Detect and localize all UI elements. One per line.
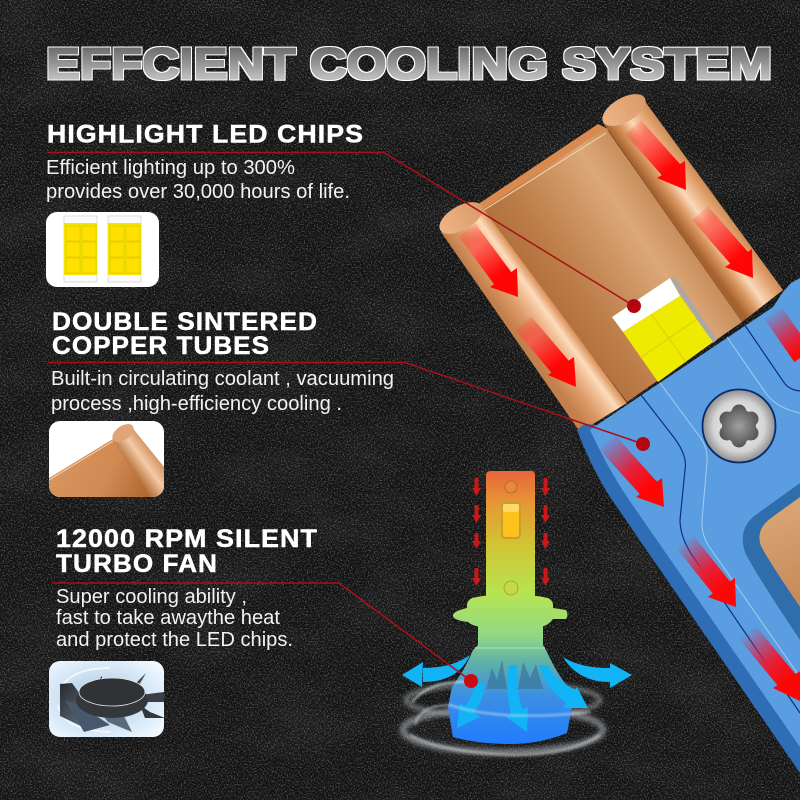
description: fast to take awaythe heat — [56, 607, 280, 629]
callout dot — [627, 299, 641, 313]
air swirl rings, front — [410, 682, 600, 755]
bulb details — [475, 481, 545, 689]
title: EFFCIENT COOLING SYSTEM — [46, 40, 772, 88]
red flow arrow: left tube upper — [467, 230, 518, 297]
red flow arrow: right tube lower — [700, 213, 753, 278]
red heat arrows beside stem — [472, 478, 550, 586]
thumbnail: copper tube — [49, 420, 164, 497]
red flow arrow: left tube lower — [523, 323, 576, 387]
blue housing — [577, 278, 800, 773]
red flow arrow: housing 4 — [773, 313, 800, 356]
heading — [56, 525, 318, 578]
bulb body — [448, 471, 572, 744]
heading: DOUBLE SINTERED — [52, 308, 318, 336]
copper back plate — [468, 124, 742, 402]
description — [56, 586, 293, 651]
section: 12000 RPM silent turbo fan — [49, 525, 478, 737]
heading — [52, 308, 318, 360]
description: Built-in circulating coolant , vacuuming — [51, 368, 394, 390]
section: double sintered copper tubes — [48, 308, 650, 497]
right copper tube — [597, 88, 783, 322]
heading: 12000 RPM SILENT — [56, 525, 318, 553]
thumbnail: LED chips — [46, 212, 159, 287]
description — [46, 157, 350, 203]
torx screw — [702, 390, 776, 462]
left copper tube — [434, 196, 627, 432]
heading: HIGHLIGHT LED CHIPS — [47, 120, 364, 148]
leader line to chip — [47, 152, 634, 306]
callout dot — [464, 674, 478, 688]
description: process ,high-efficiency cooling . — [51, 393, 342, 415]
illustration: copper heat pipe LED module — [434, 88, 800, 773]
description: Super cooling ability , — [56, 586, 247, 608]
LED chip — [612, 278, 717, 382]
red flow arrow: right tube upper — [633, 127, 686, 190]
description: Efficient lighting up to 300% — [46, 157, 295, 179]
air swirl rings, back — [403, 683, 603, 752]
heading: COPPER TUBES — [52, 332, 270, 360]
thumbnail: turbo fan — [49, 661, 165, 737]
description — [51, 368, 394, 415]
leader line to fan — [52, 583, 471, 681]
heading: TURBO FAN — [56, 550, 218, 578]
section: highlight LED chips — [46, 120, 641, 313]
description: and protect the LED chips. — [56, 629, 293, 651]
red flow arrow: housing 3 — [748, 633, 800, 702]
red flow arrow: housing 2 — [685, 542, 736, 607]
blue air arrow: lower right — [539, 665, 588, 708]
red flow arrow: housing 1 — [607, 442, 664, 507]
blue air arrow: lower left — [457, 683, 485, 728]
callout dot — [636, 437, 650, 451]
blue air arrow: left — [402, 655, 470, 687]
description: provides over 30,000 hours of life. — [46, 181, 350, 203]
blue air arrow: middle — [506, 665, 528, 732]
thermal-coloured bulb diagram — [402, 471, 632, 755]
blue air arrow: right — [563, 657, 632, 688]
leader line to housing — [48, 362, 643, 444]
